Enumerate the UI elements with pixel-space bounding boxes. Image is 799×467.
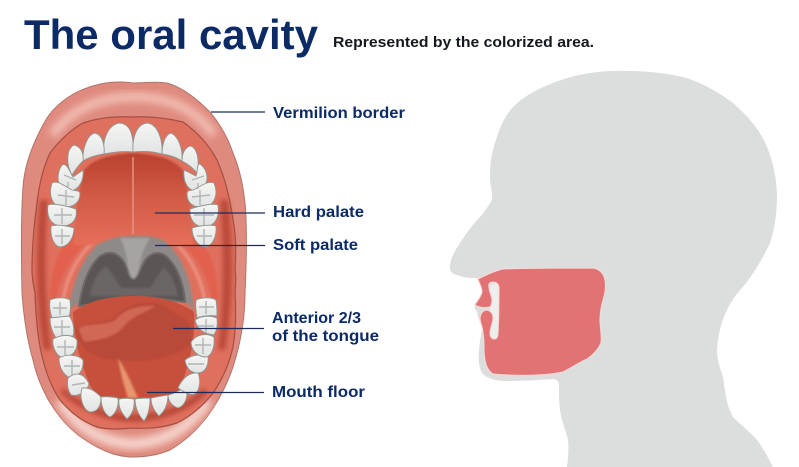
tongue (76, 303, 192, 361)
leader line: mouth floor (147, 392, 264, 394)
leader line: vermilion border (211, 111, 265, 113)
hard palate (74, 153, 193, 245)
soft palate arch (70, 236, 194, 310)
gum highlights (63, 238, 205, 300)
uvula (120, 238, 150, 278)
label: anterior 2/3 of the tongue: Anterior 2/3 (272, 310, 361, 327)
inner cheek shadow (37, 200, 232, 422)
mouth slot (490, 288, 500, 334)
tongue highlight (78, 306, 155, 342)
lower teeth (50, 298, 217, 421)
leader line: soft palate (155, 244, 265, 246)
label: anterior 2/3 of the tongue (272, 310, 379, 345)
label: soft palate: Soft palate (273, 237, 358, 254)
title: The oral cavity (24, 11, 319, 58)
label: hard palate: Hard palate (273, 204, 364, 221)
throat arches (90, 266, 178, 296)
upper teeth (48, 123, 218, 247)
mouth interior (32, 117, 236, 429)
leader line: hard palate (155, 212, 265, 214)
subtitle: Represented by the colorized area. (333, 34, 594, 51)
lower lip highlight (60, 400, 208, 444)
leader line: tongue (173, 328, 264, 330)
illustration: open mouth (21, 82, 247, 457)
lower molar grooves (53, 301, 214, 385)
frenulum (118, 358, 138, 398)
upper molar grooves (54, 175, 214, 245)
label: vermilion border: Vermilion border (273, 105, 405, 122)
side gums (50, 225, 218, 300)
head silhouette (450, 71, 777, 467)
upper lip highlight (52, 97, 214, 135)
label: mouth floor: Mouth floor (272, 384, 365, 401)
tongue floor (73, 296, 194, 400)
outer lips (21, 82, 247, 457)
colorized oral area (475, 268, 605, 375)
throat (79, 253, 185, 306)
palate midline (132, 157, 134, 234)
label: anterior 2/3 of the tongue: of the tongue (272, 328, 379, 345)
